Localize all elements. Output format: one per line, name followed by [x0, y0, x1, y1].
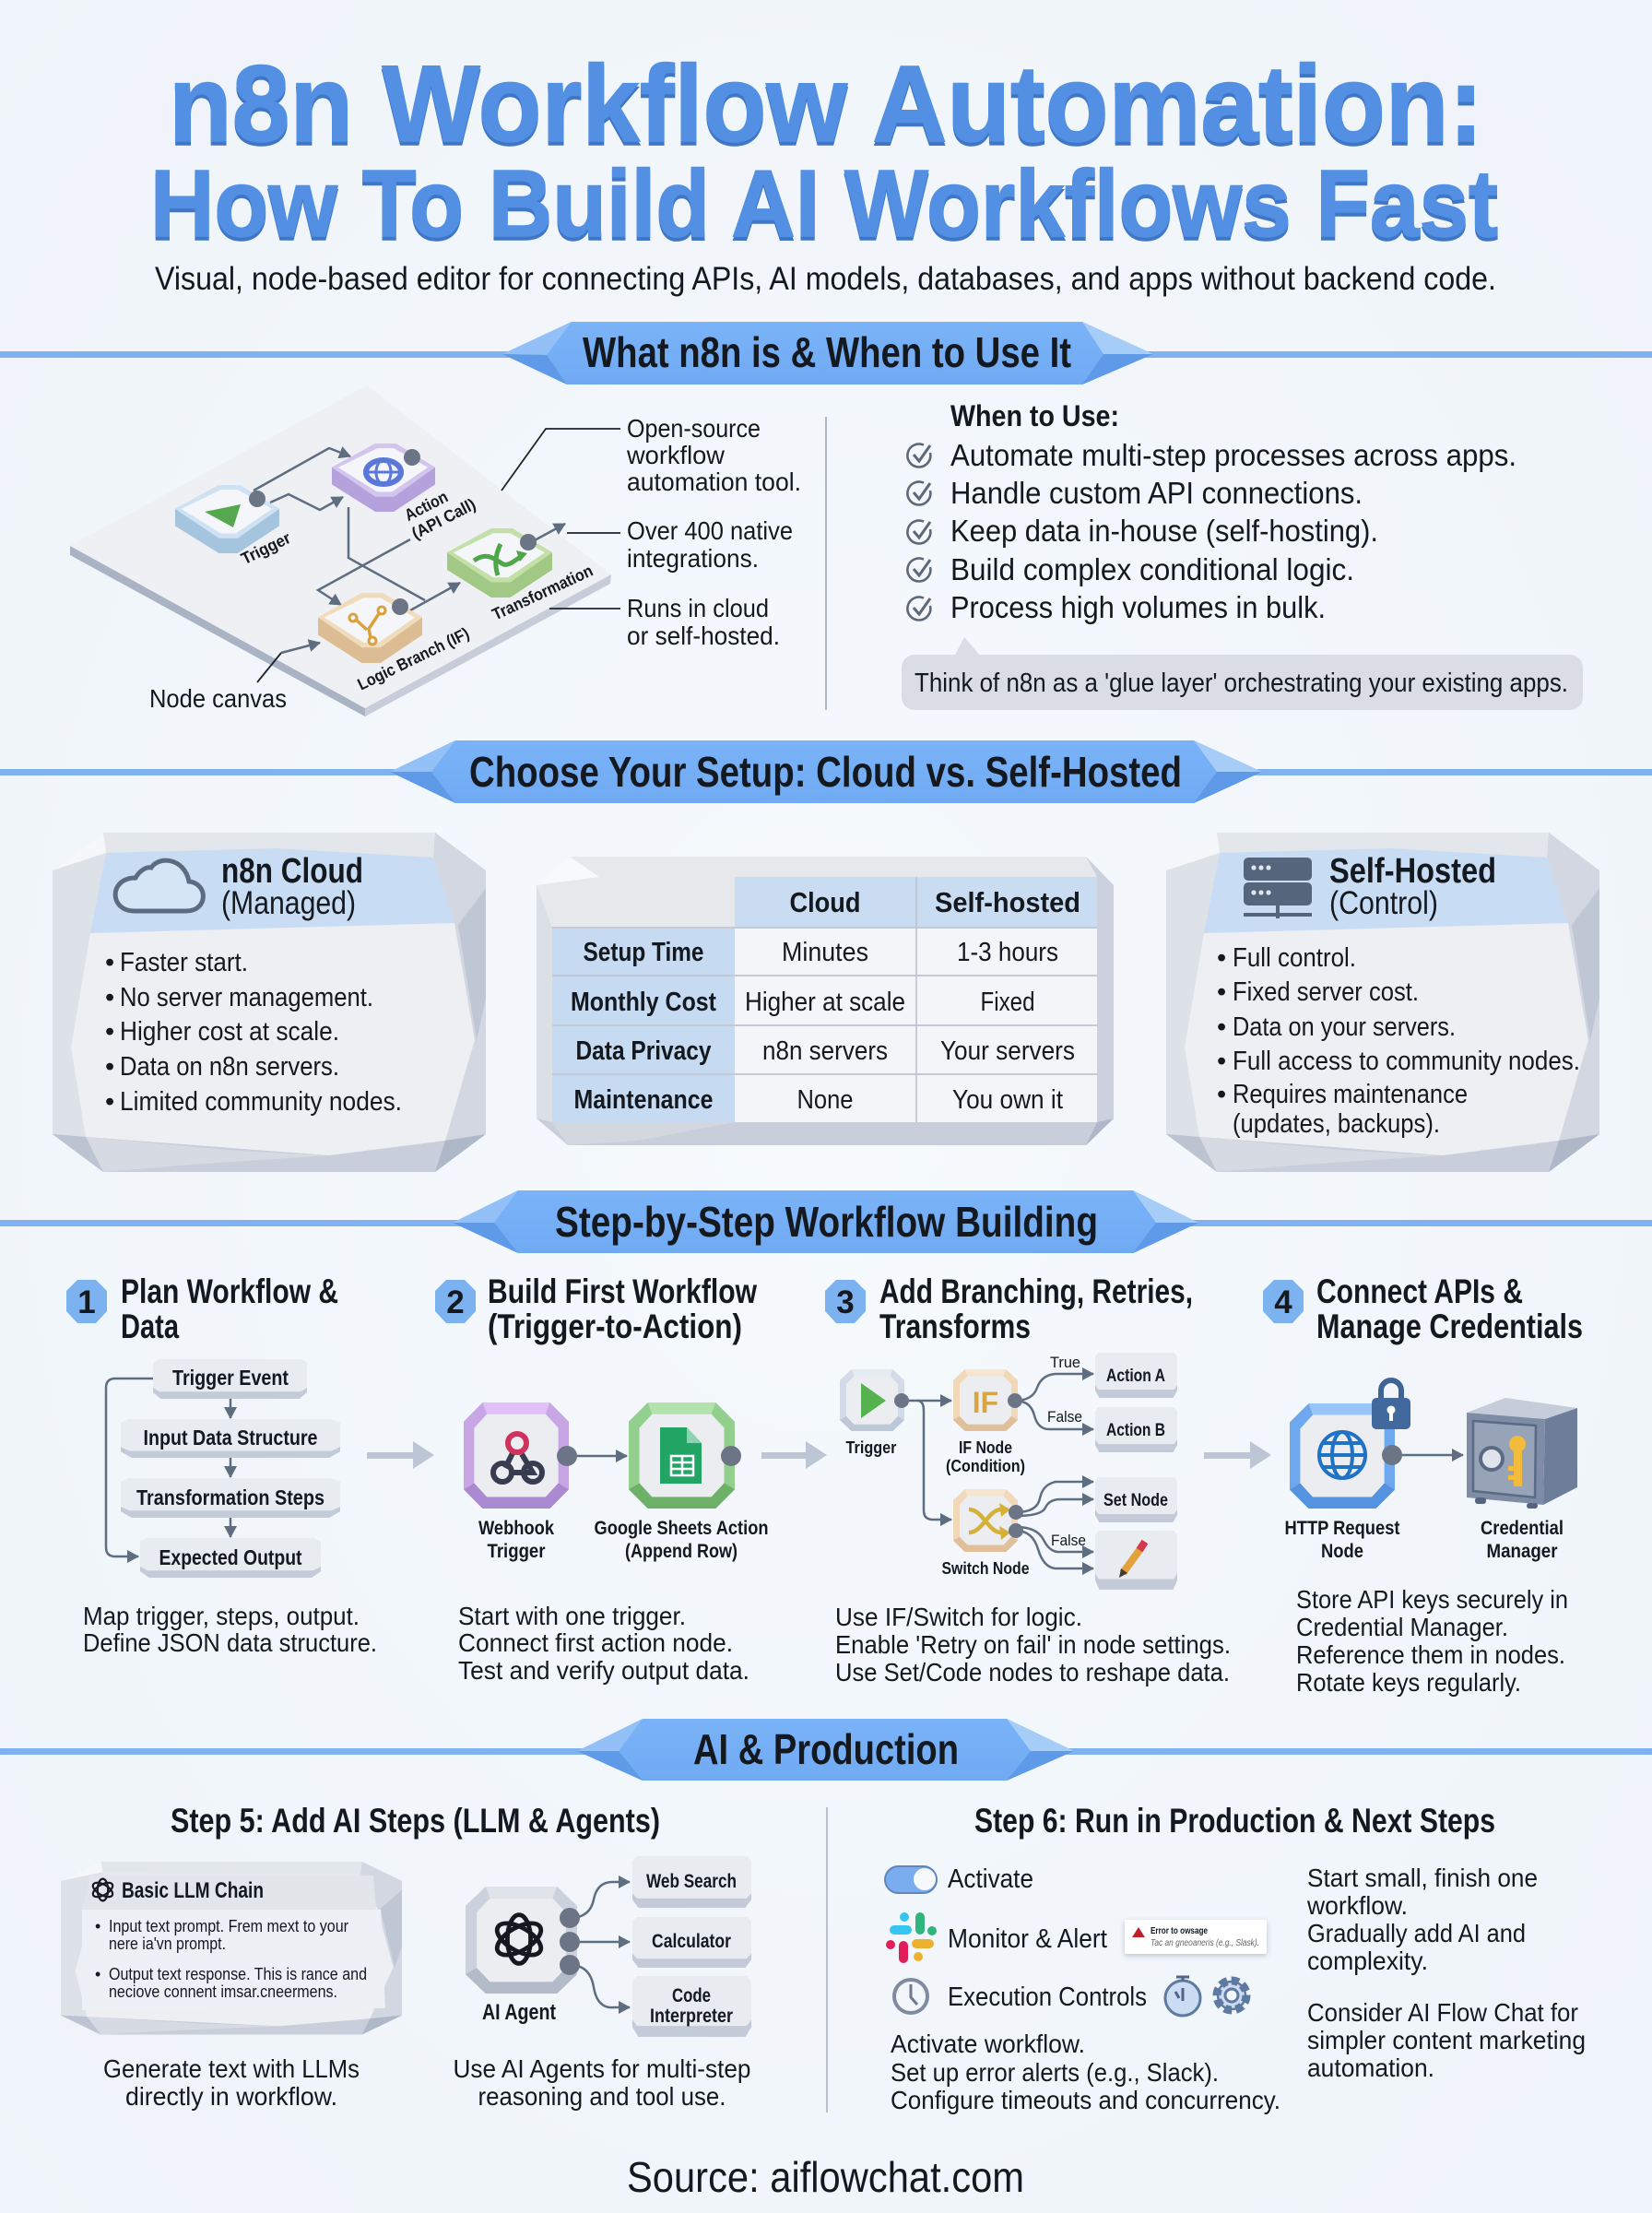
text: step 1: Define JSON data structure. — [83, 1628, 377, 1657]
table header — [789, 886, 1080, 918]
row: setup time: Setup Time — [583, 938, 704, 967]
box: input data: Input Data Structure — [144, 1426, 317, 1450]
node: google sheets: (Append Row) — [625, 1541, 738, 1562]
heading: n8n cloud: (Managed) — [221, 885, 356, 921]
chain bullets: • — [95, 1965, 100, 1983]
callout: open-source: automation tool. — [627, 467, 801, 496]
text: next steps — [1306, 1864, 1586, 2082]
cloud bullets: • — [105, 983, 114, 1012]
box: calculator — [632, 1917, 751, 1968]
text: step 3 — [835, 1603, 1231, 1686]
text: next steps: Consider AI Flow Chat for — [1307, 1998, 1578, 2027]
text: step 3: Use IF/Switch for logic. — [835, 1603, 1082, 1631]
text: step 4 — [1296, 1585, 1568, 1697]
section banner: steps: Step-by-Step Workflow Building — [555, 1198, 1098, 1246]
item 2: Handle custom API connections. — [950, 476, 1363, 510]
text: step 2 — [458, 1602, 749, 1685]
arrow — [761, 1441, 827, 1469]
row: data privacy: n8n servers — [762, 1036, 888, 1066]
activate row: Activate — [948, 1864, 1033, 1894]
card: basic llm chain: Basic LLM Chain — [122, 1878, 264, 1903]
source: Source: aiflowchat.com — [627, 2153, 1024, 2201]
row: data privacy: Data Privacy — [575, 1036, 712, 1066]
cloud bullets: No server management. — [120, 983, 373, 1012]
self-hosted bullets: Full control. — [1233, 943, 1356, 973]
icon: credential safe: Credential — [1481, 1518, 1564, 1539]
text: step 3: Enable 'Retry on fail' in node settings. — [835, 1630, 1231, 1659]
text: llm: Generate text with LLMs — [103, 2054, 360, 2083]
box: expected output: Expected Output — [159, 1545, 302, 1569]
badge 2: 2 — [446, 1284, 465, 1320]
box: expected output — [140, 1538, 321, 1578]
node: switch — [942, 1489, 1029, 1578]
text: step 4: Store API keys securely in — [1296, 1585, 1568, 1614]
callout: open-source — [502, 414, 801, 496]
text: production: Activate workflow. — [891, 2030, 1085, 2058]
heading: self-hosted: Self-Hosted — [1329, 852, 1496, 891]
row: maintenance: You own it — [952, 1085, 1063, 1115]
node: http request: HTTP Request — [1285, 1518, 1400, 1539]
node: action — [332, 444, 478, 543]
text: agents: Use AI Agents for multi-step — [454, 2054, 750, 2083]
cloud bullets: Limited community nodes. — [120, 1087, 402, 1117]
callout: integrations — [567, 516, 793, 573]
badge 3: 3 — [836, 1284, 855, 1320]
item 5: Process high volumes in bulk. — [950, 590, 1326, 624]
heading 2: Build First Workflow — [488, 1272, 757, 1310]
callout: integrations: integrations. — [627, 544, 759, 573]
node: trigger: Trigger — [846, 1438, 896, 1457]
panel: self-hosted — [1166, 833, 1599, 1172]
box: pencil — [1095, 1531, 1177, 1590]
text: step 4: Reference them in nodes. — [1296, 1640, 1565, 1669]
chain bullets: neciove connent imsar.cneermens. — [109, 1982, 337, 2001]
panel: comparison table — [537, 857, 1114, 1145]
text: next steps: simpler content marketing — [1307, 2026, 1586, 2054]
text: step 2: Test and verify output data. — [458, 1656, 749, 1685]
callout: hosting: or self-hosted. — [627, 621, 780, 650]
panel: when to use — [907, 399, 1516, 624]
box: action a: Action A — [1106, 1367, 1165, 1386]
icon: credential safe — [1467, 1398, 1577, 1562]
node: ai agent — [466, 1882, 630, 2025]
text: step 3: Use Set/Code nodes to reshape data. — [835, 1658, 1230, 1686]
step 4 — [1263, 1272, 1583, 1697]
cloud bullets — [105, 948, 402, 1117]
panel: when to use: When to Use: — [950, 399, 1119, 432]
node: trigger — [175, 485, 293, 568]
box: code interpreter — [632, 1976, 751, 2037]
heading 4 — [1316, 1272, 1583, 1345]
self-hosted bullets: • — [1217, 977, 1226, 1007]
node: trigger: Trigger — [238, 528, 293, 568]
text: production: Configure timeouts and concurrency. — [891, 2086, 1280, 2114]
step 3 — [825, 1272, 1231, 1686]
chain bullets: Input text prompt. Frem mext to your — [109, 1917, 348, 1935]
heading: step 6: Step 6: Run in Production & Next Steps — [974, 1802, 1495, 1840]
heading 2 — [488, 1272, 757, 1345]
node: if: (Condition) — [946, 1457, 1025, 1475]
title: How To Build AI Workflows Fast — [150, 150, 1498, 256]
node: google sheets: Google Sheets Action — [594, 1518, 769, 1539]
node: logic branch — [318, 593, 472, 694]
icon: stopwatch — [1165, 1977, 1200, 2016]
box: transformation — [121, 1478, 340, 1518]
section banner: AI and production: AI & Production — [693, 1725, 959, 1773]
cloud bullets: • — [105, 1087, 114, 1117]
text: next steps: complexity. — [1307, 1947, 1428, 1975]
logo — [90, 1879, 115, 1900]
chain bullets: Output text response. This is rance and — [109, 1965, 367, 1983]
node: action: Action — [401, 487, 451, 525]
row: monthly cost: Monthly Cost — [571, 988, 716, 1017]
heading 3: Transforms — [879, 1308, 1031, 1345]
icon: server — [1244, 858, 1312, 918]
text: step 2: Connect first action node. — [458, 1628, 733, 1657]
arrow — [367, 1441, 434, 1469]
row: setup time — [583, 938, 1058, 967]
heading: step 5: Step 5: Add AI Steps (LLM & Agents) — [171, 1802, 660, 1840]
text: llm: directly in workflow. — [125, 2082, 337, 2111]
monitor row: Monitor & Alert — [948, 1924, 1107, 1954]
callout: hosting: Runs in cloud — [627, 594, 769, 622]
node: trigger — [840, 1369, 909, 1457]
step 1 — [66, 1272, 377, 1657]
icon: slack — [891, 1917, 932, 1959]
node: if — [946, 1369, 1025, 1475]
text: next steps: Gradually add AI and — [1307, 1919, 1526, 1947]
node: webhook: Webhook — [478, 1518, 554, 1539]
cloud bullets: • — [105, 948, 114, 977]
error toast: Tac an gneoaneris (e.g., Slask). — [1150, 1938, 1259, 1948]
callout: node canvas — [149, 643, 320, 713]
monitor row — [891, 1917, 1267, 1959]
node: webhook — [464, 1402, 627, 1562]
icon: gear — [1217, 1981, 1246, 2010]
heading 1: Data — [121, 1308, 179, 1345]
labels: true false: True — [1050, 1354, 1080, 1371]
icon: credential safe: Manager — [1486, 1541, 1558, 1562]
badge 3 — [825, 1280, 866, 1323]
box: web search — [632, 1856, 751, 1908]
node: if: IF Node — [959, 1438, 1012, 1457]
activate row — [885, 1864, 1033, 1894]
text: step 2: Start with one trigger. — [458, 1602, 686, 1630]
heading: self-hosted — [1329, 852, 1496, 921]
section banner: setup — [0, 740, 1652, 803]
text: step 1 — [83, 1602, 377, 1657]
text: next steps: automation. — [1307, 2053, 1434, 2082]
arrow — [1204, 1441, 1271, 1469]
heading: self-hosted: (Control) — [1329, 885, 1438, 921]
error toast — [1125, 1920, 1267, 1954]
cloud bullets: • — [105, 1017, 114, 1047]
chain bullets — [95, 1917, 367, 2001]
callout: open-source: Open-source — [627, 414, 761, 443]
box: transformation: Transformation Steps — [136, 1485, 324, 1509]
execution row — [894, 1977, 1246, 2016]
badge 4: 4 — [1274, 1284, 1292, 1320]
text: agents: reasoning and tool use. — [478, 2082, 726, 2111]
self-hosted bullets: • — [1217, 1047, 1226, 1076]
row: setup time: Minutes — [782, 938, 868, 967]
item 4: Build complex conditional logic. — [950, 552, 1354, 586]
row: monthly cost: Higher at scale — [745, 988, 905, 1017]
callout: glue layer: Think of n8n as a 'glue layer' orchestrating your existing apps. — [914, 669, 1568, 698]
section banner: setup: Choose Your Setup: Cloud vs. Self-Hosted — [469, 748, 1182, 796]
heading: n8n cloud: n8n Cloud — [221, 852, 363, 891]
panel: n8n cloud — [53, 833, 486, 1172]
node: if: IF — [973, 1386, 998, 1419]
execution row: Execution Controls — [948, 1982, 1147, 2012]
text: next steps: workflow. — [1306, 1891, 1408, 1920]
node: webhook: Trigger — [487, 1541, 546, 1562]
title: n8n Workflow Automation: — [169, 43, 1483, 165]
panel: step 5 — [61, 1802, 751, 2111]
item 1: Automate multi-step processes across apps. — [950, 438, 1516, 472]
title — [150, 43, 1498, 256]
heading: n8n cloud — [221, 852, 363, 921]
self-hosted bullets: Requires maintenance — [1233, 1080, 1468, 1109]
node: http request: Node — [1321, 1541, 1363, 1562]
row: data privacy: Your servers — [940, 1036, 1075, 1066]
section banner: steps — [0, 1190, 1652, 1253]
section banner: AI and production — [0, 1719, 1652, 1781]
row: setup time: 1-3 hours — [957, 938, 1058, 967]
text: step 1: Map trigger, steps, output. — [83, 1602, 360, 1630]
heading 1: Plan Workflow & — [121, 1272, 338, 1310]
badge 2 — [435, 1280, 476, 1323]
node: transformation — [447, 528, 596, 624]
node: switch: Switch Node — [942, 1559, 1029, 1578]
icon: lock — [1372, 1380, 1410, 1429]
node: logic branch: Logic Branch (IF) — [355, 624, 472, 694]
self-hosted bullets: • — [1217, 1012, 1226, 1042]
self-hosted bullets: • — [1217, 1080, 1226, 1109]
self-hosted bullets: Fixed server cost. — [1233, 977, 1419, 1007]
heading 1 — [121, 1272, 338, 1345]
text: llm — [103, 2054, 360, 2111]
text: production — [891, 2030, 1280, 2114]
text: production: Set up error alerts (e.g., Slack). — [891, 2058, 1219, 2087]
box: input data — [121, 1419, 340, 1458]
flow: planning — [106, 1359, 340, 1578]
row: monthly cost: Fixed — [981, 988, 1034, 1017]
box: code interpreter: Interpreter — [650, 2006, 733, 2027]
table header: Self-hosted — [935, 886, 1080, 918]
heading 3 — [879, 1272, 1193, 1345]
chain bullets: • — [95, 1917, 100, 1935]
connector lines — [254, 448, 565, 610]
callout: node canvas: Node canvas — [149, 684, 287, 713]
card: basic llm chain — [61, 1862, 402, 2034]
badge 1 — [66, 1280, 107, 1323]
diagram: node canvas — [70, 385, 611, 716]
self-hosted bullets: (updates, backups). — [1233, 1109, 1440, 1139]
badge 1: 1 — [77, 1284, 96, 1320]
callout: hosting — [549, 594, 780, 650]
labels: true false: False — [1047, 1408, 1082, 1426]
node: action: (API Call) — [408, 495, 478, 543]
self-hosted bullets: • — [1217, 943, 1226, 973]
self-hosted bullets: Full access to community nodes. — [1233, 1047, 1580, 1076]
table header: Cloud — [789, 886, 861, 918]
box: set node — [1095, 1477, 1177, 1522]
text: step 4: Rotate keys regularly. — [1296, 1668, 1521, 1697]
self-hosted bullets — [1217, 943, 1580, 1139]
box: set node: Set Node — [1103, 1491, 1168, 1510]
row: monthly cost — [571, 988, 1034, 1017]
branch connectors — [902, 1374, 1093, 1568]
section banner: what n8n is: What n8n is & When to Use It — [583, 328, 1071, 376]
section banner: what n8n is — [0, 322, 1652, 385]
box: action b: Action B — [1106, 1421, 1165, 1440]
cloud bullets: Data on n8n servers. — [120, 1052, 339, 1082]
icon: clock — [894, 1980, 927, 2013]
item 3: Keep data in-house (self-hosting). — [950, 514, 1378, 548]
callout: integrations: Over 400 native — [627, 516, 793, 545]
badge 4 — [1263, 1280, 1304, 1323]
row: maintenance: None — [796, 1085, 854, 1115]
box: action a — [1095, 1353, 1177, 1398]
node: ai agent: AI Agent — [482, 2000, 556, 2025]
box: web search: Web Search — [646, 1871, 737, 1892]
heading 4: Manage Credentials — [1316, 1308, 1583, 1345]
cloud bullets: Higher cost at scale. — [120, 1017, 339, 1047]
labels: true false: False — [1051, 1532, 1086, 1549]
box: calculator: Calculator — [652, 1931, 731, 1952]
text: agents — [454, 2054, 750, 2111]
chain bullets: nere ia'vn prompt. — [109, 1935, 226, 1953]
node: transformation: Transformation — [490, 562, 596, 624]
heading 2: (Trigger-to-Action) — [488, 1308, 742, 1345]
box: action b — [1095, 1407, 1177, 1452]
error toast: Error to owsage — [1150, 1926, 1208, 1936]
node: google sheets — [594, 1402, 769, 1562]
box: trigger event — [153, 1359, 307, 1399]
row: data privacy — [575, 1036, 1075, 1066]
callout: glue layer — [902, 637, 1583, 710]
cloud bullets: Faster start. — [120, 948, 248, 977]
row: maintenance — [573, 1085, 1063, 1115]
heading 4: Connect APIs & — [1316, 1272, 1523, 1310]
text: step 4: Credential Manager. — [1296, 1613, 1508, 1641]
box: trigger event: Trigger Event — [172, 1366, 289, 1390]
box: code interpreter: Code — [672, 1985, 711, 2006]
self-hosted bullets: Data on your servers. — [1233, 1012, 1456, 1042]
node: http request — [1285, 1403, 1463, 1562]
cloud bullets: • — [105, 1052, 114, 1082]
heading 3: Add Branching, Retries, — [879, 1272, 1193, 1310]
panel: step 6 — [885, 1802, 1586, 2114]
subtitle: Visual, node-based editor for connecting APIs, AI models, databases, and apps without backend code. — [155, 261, 1496, 297]
step 2 — [435, 1272, 769, 1685]
row: maintenance: Maintenance — [573, 1085, 714, 1115]
labels: true false — [1047, 1354, 1086, 1549]
icon: cloud — [115, 860, 203, 911]
callout: open-source: workflow — [626, 441, 726, 469]
text: next steps: Start small, finish one — [1307, 1864, 1538, 1892]
